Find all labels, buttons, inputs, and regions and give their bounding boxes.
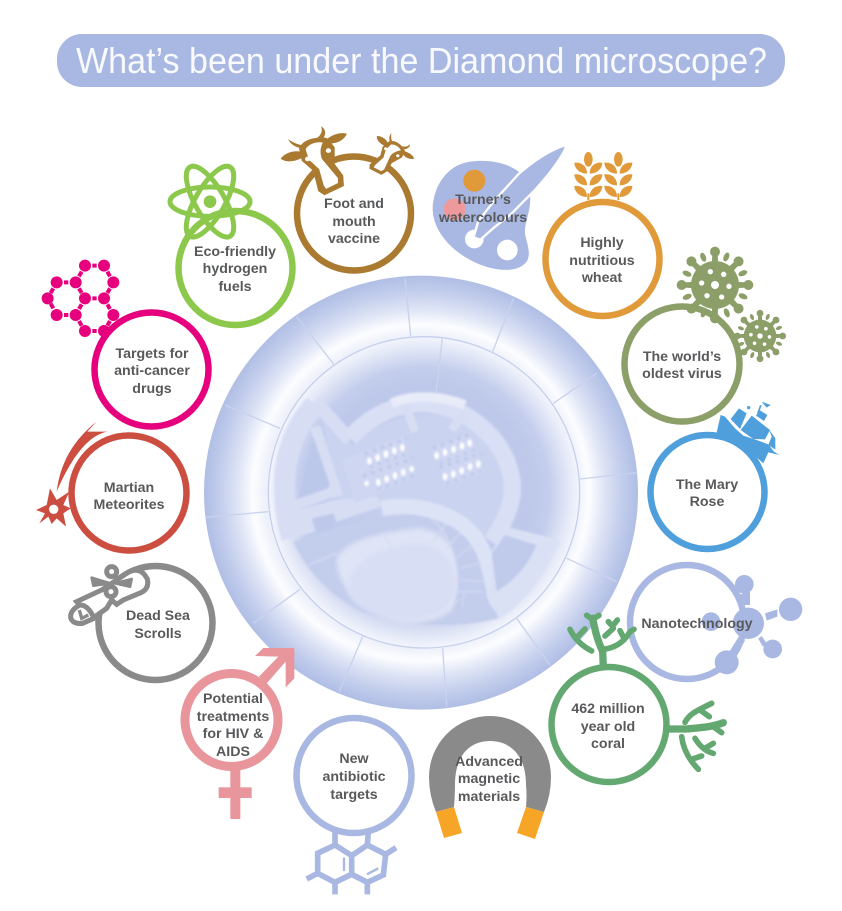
icon: cows [281,125,419,195]
label: coral [591,736,625,752]
label: Highly [580,235,624,251]
label: Advanced [455,754,523,770]
label: vaccine [328,231,380,247]
label: Scrolls [134,626,182,642]
icon: horseshoe magnet [429,716,551,839]
icon: ship [717,402,779,463]
icon: antibiotic molecule [307,832,396,894]
icon: coral [570,615,723,769]
central microscope disc [204,276,638,710]
label: nutritious [569,253,635,269]
ring [94,312,208,426]
label: Turner’s [455,192,511,208]
icon: molecule [702,575,802,674]
grilles [363,433,485,489]
panel: the Mary Rose [650,402,779,549]
label: Targets for [115,346,189,362]
label: targets [330,787,378,803]
label: fuels [218,279,252,295]
ring [552,667,666,782]
label: oldest virus [642,366,722,382]
building floor plan [278,397,560,625]
label: for HIV & [203,726,263,742]
label: Nanotechnology [641,616,753,632]
icon: atom [170,160,250,244]
ring [546,202,660,316]
label: antibiotic [322,769,386,785]
label: anti-cancer [114,363,190,379]
panel: 462 million year old coral [552,615,723,782]
ring [630,565,744,679]
icon: scroll [71,567,148,623]
panel: Turner's watercolours [433,147,565,270]
ring [297,156,411,270]
ring [178,211,292,325]
label: The world’s [643,349,721,365]
icon: gender symbols [219,648,294,819]
panel: dead sea scrolls [71,566,212,680]
label: hydrogen [203,261,267,277]
label: watercolours [438,210,527,226]
icon: viruses [677,247,786,362]
icon: molecule rings [42,260,119,337]
label: AIDS [216,744,250,760]
title: What’s been under the Diamond microscope? [76,40,767,81]
panel: highly nutritious wheat [546,152,660,316]
label: year old [581,719,635,735]
label: Martian [104,480,154,496]
panel: martian meteorites [36,422,186,550]
label: materials [458,789,520,805]
label: magnetic [458,771,520,787]
panel: potential treatments for HIV and AIDS [185,648,294,819]
panel: targets for anti-cancer drugs [42,260,208,426]
label: Potential [203,691,263,707]
ring [185,674,278,766]
label: drugs [132,381,172,397]
label: 462 million [571,701,645,717]
ring [624,306,740,422]
label: Dead Sea [126,608,190,624]
label: Rose [690,494,724,510]
ring [72,436,186,550]
label: New [339,751,370,767]
label: treatments [197,709,269,725]
icon: palette and brush [433,147,565,270]
panel: nanotechnology [630,565,802,679]
label: Eco-friendly [194,244,276,260]
panel: advanced magnetic materials [429,716,551,839]
panel: new antibiotic targets [296,718,412,894]
ring [98,566,212,680]
label: mouth [332,214,376,230]
panel: the world's oldest virus [624,247,786,422]
ring [650,435,764,549]
icon: wheat [574,152,632,200]
ring [296,718,412,833]
label: The Mary [676,477,738,493]
icon: meteor [36,422,107,527]
label: Foot and [324,196,384,212]
label: wheat [581,270,622,286]
label: Meteorites [94,497,165,513]
panel: foot and mouth vaccine [281,125,419,271]
panel: eco-friendly hydrogen fuels [170,160,292,325]
